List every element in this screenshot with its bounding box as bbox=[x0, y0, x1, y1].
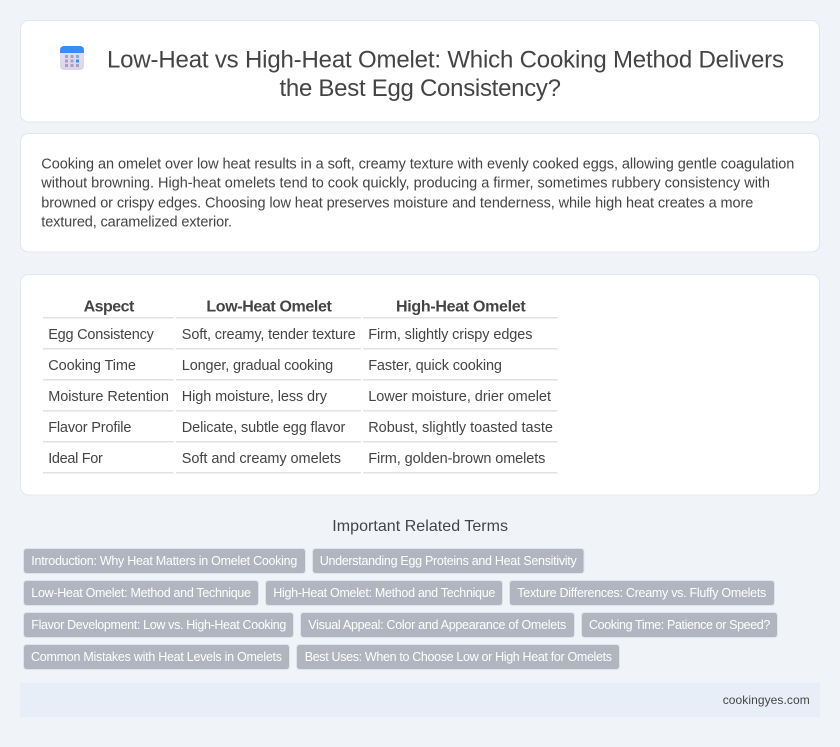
row: ideal for: Soft and creamy omelets bbox=[182, 451, 341, 467]
text block: summary paragraph: browned or crispy edges. Choosing low heat preserves moisture and tenderness, while high heat creates a more bbox=[41, 195, 753, 211]
panel: related term chips: Cooking Time: Patience or Speed? bbox=[589, 618, 770, 632]
table header row: Low-Heat Omelet bbox=[206, 299, 332, 316]
row: moisture retention: High moisture, less dry bbox=[182, 389, 328, 405]
row: flavor profile bbox=[48, 420, 553, 436]
title: the Best Egg Consistency? bbox=[280, 75, 561, 102]
heading: important related terms: Important Related Terms bbox=[332, 518, 508, 535]
panel: related term chips bbox=[24, 548, 778, 670]
table header row: Aspect bbox=[84, 299, 135, 316]
panel: related term chips: Common Mistakes with Heat Levels in Omelets bbox=[31, 650, 282, 664]
row: cooking time: Longer, gradual cooking bbox=[182, 358, 333, 374]
row: egg consistency: Egg Consistency bbox=[48, 327, 155, 343]
panel: related term chips: Best Uses: When to Choose Low or High Heat for Omelets bbox=[305, 650, 612, 664]
row: egg consistency: Firm, slightly crispy edges bbox=[368, 327, 532, 343]
footer source text: cookingyes.com bbox=[723, 693, 810, 707]
panel: related term chips: Introduction: Why Heat Matters in Omelet Cooking bbox=[31, 554, 297, 568]
panel: footer bbox=[20, 683, 820, 717]
row: cooking time bbox=[48, 358, 502, 374]
row: moisture retention: Lower moisture, drier omelet bbox=[368, 389, 551, 405]
text block: summary paragraph: textured, caramelized exterior. bbox=[41, 214, 232, 230]
table header row: High-Heat Omelet bbox=[396, 299, 526, 316]
panel: related term chips: Texture Differences: Creamy vs. Fluffy Omelets bbox=[517, 586, 766, 600]
panel: header bbox=[20, 20, 820, 122]
row: moisture retention bbox=[48, 389, 551, 405]
panel: related term chips: Flavor Development: Low vs. High-Heat Cooking bbox=[31, 618, 286, 632]
panel: related term chips: Low-Heat Omelet: Method and Technique bbox=[31, 586, 251, 600]
row: cooking time: Faster, quick cooking bbox=[368, 358, 502, 374]
row: egg consistency bbox=[48, 327, 532, 343]
row: ideal for bbox=[48, 451, 545, 467]
row: flavor profile: Robust, slightly toasted taste bbox=[368, 420, 553, 436]
panel: related term chips: Visual Appeal: Color and Appearance of Omelets bbox=[308, 618, 566, 632]
panel: related term chips: Understanding Egg Proteins and Heat Sensitivity bbox=[320, 554, 577, 568]
row: flavor profile: Flavor Profile bbox=[48, 420, 131, 436]
table row lines bbox=[43, 317, 558, 474]
row: ideal for: Firm, golden-brown omelets bbox=[368, 451, 545, 467]
text block: summary paragraph: without browning. High-heat omelets tend to cook quickly, producing a firmer, sometimes rubbery consistency with bbox=[40, 176, 770, 192]
text block: summary paragraph: Cooking an omelet over low heat results in a soft, creamy texture with evenly cooked eggs, allowing gentle coagulation bbox=[41, 156, 794, 172]
row: cooking time: Cooking Time bbox=[48, 358, 136, 374]
row: flavor profile: Delicate, subtle egg flavor bbox=[182, 420, 346, 436]
icon: calendar bbox=[60, 46, 84, 70]
row: egg consistency: Soft, creamy, tender texture bbox=[182, 327, 356, 343]
panel: related term chips: High-Heat Omelet: Method and Technique bbox=[273, 586, 495, 600]
row: moisture retention: Moisture Retention bbox=[48, 389, 169, 405]
table header row bbox=[84, 299, 526, 316]
panel: description bbox=[20, 134, 820, 252]
panel: comparison table bbox=[20, 274, 820, 495]
title: Low-Heat vs High-Heat Omelet: Which Cooking Method Delivers bbox=[107, 46, 784, 74]
row: ideal for: Ideal For bbox=[48, 451, 103, 467]
